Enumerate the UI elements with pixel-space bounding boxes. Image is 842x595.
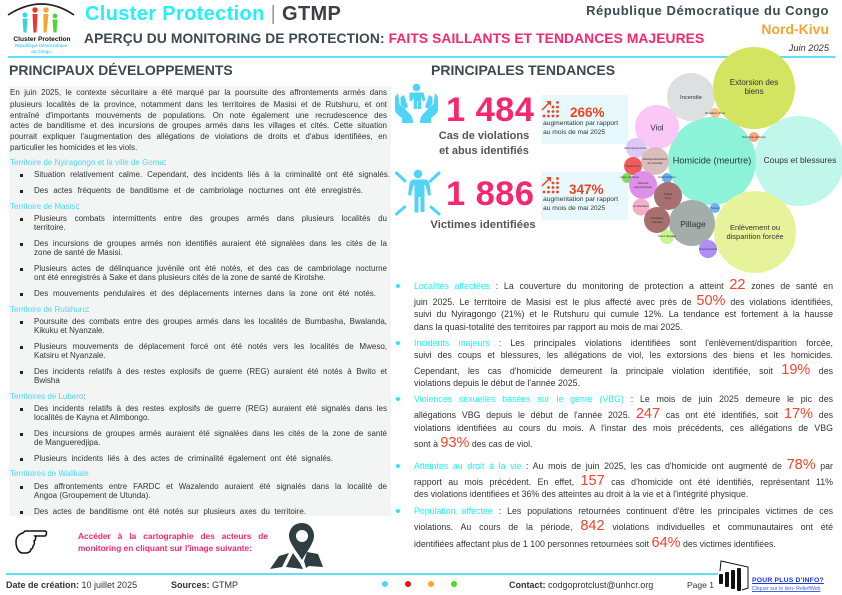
callout: 347%: augmentation par rapport <box>543 196 618 203</box>
panel: principaux développements text: Des actes fréquents de banditisme et de cambriolage nocturnes ont été enregistrés. <box>34 186 363 195</box>
panel: principales tendances text: sont à 93% des cas de viol. <box>414 435 533 451</box>
icon: hands holding person <box>395 84 438 123</box>
panel: principales tendances text: Incidents majeurs : Les principales violations identifiées sont l'enlèvement/disparition forcée, <box>414 338 833 348</box>
panel: principaux développements text: Des mouvements pendulaires et des déplacements internes dans la zone ont été notés. <box>34 289 376 298</box>
panel: principaux développements text: Territoire de Masisi: <box>10 202 79 211</box>
chart: bubble chart of violations: Destruction <box>626 164 641 168</box>
panel: principales tendances text: suivi des coups et blessures, les allégations de viol, les extorsions des biens et les homicides. <box>414 350 833 360</box>
title: Cluster Protection | GTMP <box>85 3 341 25</box>
icon: map pin <box>270 523 323 569</box>
logo: Cluster Protection: du Congo <box>31 49 51 54</box>
link: pour plus d'info: POUR PLUS D'INFO? <box>752 577 824 584</box>
chart: bubble chart of violations: forcé <box>665 196 672 200</box>
chart: bubble chart of violations: disparition forcée <box>726 232 784 241</box>
link: pour plus d'info: Cliquer sur le lien- ReliefWeb <box>752 586 820 592</box>
callout: 266% <box>541 95 628 144</box>
panel: principaux développements text: Kikuku et Nyanzale. <box>34 326 105 335</box>
icon: pointing hand <box>15 530 48 554</box>
kpi label: cas de violations: et abus identifiés <box>439 144 529 156</box>
panel: principaux développements text: Territoire de Rutshuru: <box>10 305 89 314</box>
panel: principaux développements text: ont été enregistrés à Sake et dans plusieurs cités de la zone de santé de Kirotshe. <box>34 273 326 282</box>
panel: principaux développements text: Plusieurs combats intermittents entre des groupes armés dans plusieurs localités du <box>34 214 387 223</box>
panel: principaux développements text: zone de santé de Masisi. <box>34 248 122 257</box>
chart: bubble chart of violations: Mutilation/ Privé <box>705 111 725 115</box>
kpi label: cas de violations <box>439 130 529 156</box>
panel: principales tendances text: juin 2025. Le territoire de Masisi est le plus affecté avec près de 50% des violations identifiées, <box>414 293 833 309</box>
panel: principaux développements text: Situation relativement calme. Cependant, des incidents liés à la criminalité ont été signalés. <box>34 170 390 179</box>
panel: principaux développements text: pourrait expliquer l'augmentation des allégations de violations de droits et d'abus identifiées, en <box>10 132 387 141</box>
panel: principaux développements text: particulier les homicides et les viols. <box>10 143 137 152</box>
province heading: Nord-Kivu <box>761 21 829 37</box>
callout: 347%: 347% <box>569 182 604 197</box>
panel: principales tendances text: identifiées affectant plus de 1 100 personnes retournées soit 64% des victimes identifiées. <box>414 535 776 551</box>
callout: 347%: au mois de mai 2025 <box>543 205 605 212</box>
panel: principaux développements text: plusieurs localités de la province, notamment dans les territoires de Masisi et de Rutshuru, et ont <box>10 100 387 109</box>
panel: principaux développements text: Des incidents relatifs à des restes explosifs de guerre (REG) auraient été notés à Bwito et <box>34 367 387 376</box>
chart: bubble chart of violations: Viol <box>650 124 664 132</box>
panel: principales tendances text: Cependant, les cas d'homicide demeurent la principale violation identifiée, soit 19% des <box>414 362 833 378</box>
panel: principaux développements text: territoire. <box>34 223 66 232</box>
panel: principales tendances text: dans la quasi-totalité des territoires par rapport au mois de mai 2025. <box>414 322 682 332</box>
panel: principaux développements text: entraîné d'importants mouvements de populations. On note également une recrudescence des <box>10 111 387 120</box>
logo: Cluster Protection: République Démocratique <box>15 43 68 48</box>
chart: bubble chart of violations: Discrimination <box>658 175 676 179</box>
footer: contact: Contact: codgoprotclust@unhcr.org <box>509 580 653 590</box>
panel: principaux développements text: En juin 2025, le contexte sécuritaire a été marqué par la poursuite des affrontements armés dans <box>10 88 387 97</box>
panel: principaux développements text: Angoa (Groupement de Utunda). <box>34 491 151 500</box>
panel: principaux développements text: Des actes de banditisme ont été notés sur plusieurs axes du territoire. <box>34 507 306 516</box>
panel: principales tendances text: violations depuis le début de l'année 2025. <box>414 378 580 388</box>
panel: principaux développements text: Plusieurs incidents liés à des actes de criminalité également ont été signalés. <box>34 454 333 463</box>
chart: bubble chart of violations: Coups et blessures <box>764 155 836 165</box>
panel: principaux développements text: actes de banditisme et des incursions de groupes armés dans les villages et cités. Cette situation <box>10 121 387 130</box>
panel: principales tendances text: Localités affectées : La couverture du monitoring de protection a atteint 22 zones de santé en <box>414 277 833 293</box>
chart: bubble chart of violations: Pillage <box>680 219 706 229</box>
panel: principaux développements text: Des incidents relatifs à des restes explosifs de guerre (REG) auraient été signalés dans les <box>34 404 387 413</box>
chart: bubble chart of violations: biens <box>744 87 764 96</box>
chart: bubble chart of violations: Travaux forcés <box>699 247 718 251</box>
callout: 266%: au mois de mai 2025 <box>543 129 605 136</box>
icon: growth dots <box>542 101 559 118</box>
panel: principales tendances text: suivi du Nyiragongo (21%) et le Rutshuru qui cumule 12%. La tendance est fortement à la hausse <box>414 309 833 319</box>
panel: principales tendances text: rapport au mois précédent. En effet, 157 cas d'homicide ont été identifiés, représentant 11% <box>414 473 833 489</box>
panel: principaux développements text: Des affrontements entre FARDC et Wazalendo auraient été signalés dans la localité de <box>34 482 387 491</box>
panel: principaux développements text: Plusieurs mouvements de déplacement forcé ont été notés vers les localités de Mweso, <box>34 342 387 351</box>
panel: principales tendances text: Atteintes au droit à la vie : Au mois de juin 2025, les cas d'homicide ont augmenté de 78% par <box>414 457 833 473</box>
chart: bubble chart of violations: Recrutement forcé <box>624 146 648 150</box>
panel: principaux développements text: Poursuite des combats entre des groupes armés dans les localités de Bumbasha, Bwalanda, <box>34 317 387 326</box>
panel: principales tendances text <box>396 277 833 551</box>
logo: Cluster Protection: Cluster Protection <box>13 36 71 43</box>
chart: bubble chart of violations: psychologique <box>634 185 652 189</box>
callout: 347% <box>541 172 628 220</box>
chart: bubble chart of violations: Torture <box>711 206 720 210</box>
chart: bubble chart of violations: Extorsion des <box>730 78 778 87</box>
chart: bubble chart of violations: arbitraire <box>651 220 663 224</box>
heading: principaux développements: PRINCIPAUX DÉVELOPPEMENTS <box>9 62 233 78</box>
footer: coloured dots <box>382 581 457 587</box>
panel: principales tendances text: Violences sexuelles basées sur le genre (VBG) : Le mois de juin 2025 demeure le pic des <box>414 394 833 404</box>
chart: bubble chart of violations: Travail <box>664 192 673 196</box>
kpi label: cas de violations: Cas de violations <box>439 130 529 142</box>
callout: 266%: 266% <box>570 105 605 120</box>
chart: bubble chart of violations: Homicide (meurtre) <box>673 156 751 166</box>
panel: principaux développements text: de Mangueredjipa. <box>34 438 100 447</box>
kpi: 1 886: 1 886 <box>446 175 534 213</box>
link text: cartographie <box>78 531 268 552</box>
panel: principaux développements text: Des incursions de groupes armés non identifiés auraient été signalées dans les cités de la <box>34 239 387 248</box>
chart: bubble chart of violations: Confiscation <box>633 204 649 208</box>
link: pour plus d'info <box>752 577 824 592</box>
country heading: République Démocratique du Congo <box>586 3 829 18</box>
chart: bubble chart of violations: Détention arbitraire <box>742 135 766 139</box>
kpi: 1 484: 1 484 <box>446 91 534 129</box>
icon: person with rays <box>394 170 441 216</box>
chart: bubble chart of violations: Arrestation <box>650 216 664 220</box>
panel: principaux développements text: Territoire de Nyiragongo et la ville de Goma: <box>10 158 166 167</box>
chart: bubble chart of violations: Enlèvement ou <box>730 223 780 232</box>
chart: bubble chart of violations: Mariage/Séparation <box>643 157 668 161</box>
chart: bubble chart of violations: de la famille <box>648 161 663 165</box>
icon: growth dots <box>542 177 559 194</box>
panel: principales tendances text: violations. Au cours de la période, 842 violations individuelles et communautaires ont été <box>414 518 833 534</box>
panel: principaux développements text: Plusieurs actes de délinquance juvénile ont été notés, et des cas de cambriolage nocturne <box>34 264 387 273</box>
chart: bubble chart of violations: Taxes illégales <box>658 234 677 238</box>
panel: principaux développements text: localités de Kayna et Alimbongo. <box>34 413 150 422</box>
panel: principaux développements text: Territoires de Lubero: <box>10 392 86 401</box>
link text: cartographie: Accéder à la cartographie des acteurs de <box>78 531 268 541</box>
panel: principaux développements text: Des incursions de groupes armés auraient été signalées dans les cités de la zone de santé <box>34 429 387 438</box>
subtitle: APERÇU DU MONITORING DE PROTECTION: FAITS SAILLANTS ET TENDANCES MAJEURES <box>84 31 704 46</box>
logo: Cluster Protection <box>8 3 74 54</box>
link text: cartographie: monitoring en cliquant sur l'image suivante: <box>78 542 252 552</box>
footer: page number: Page 1 <box>687 580 714 590</box>
chart: bubble chart of violations <box>620 47 842 273</box>
panel: principaux développements text: Territoires de Walikale: <box>10 469 91 478</box>
panel: principales tendances text: allégations VBG depuis le début de l'année 2025. 247 cas ont été identifiés, soit 17% des <box>414 406 833 422</box>
panel: principales tendances text: Population affectée : Les populations retournées continuent d'être les principales victimes de ces <box>414 506 833 516</box>
panel: principaux développements text <box>9 86 391 516</box>
chart: bubble chart of violations: Incendie <box>680 95 702 101</box>
panel: principales tendances text: violations identifiées au cours du mois. A l'instar des mois précédents, ces allégations de VBG <box>414 423 833 433</box>
footer: sources: Sources: GTMP <box>171 580 238 590</box>
date: Juin 2025 <box>789 43 829 53</box>
footer: date de création: Date de création: 10 juillet 2025 <box>6 580 137 590</box>
icon: power bi logo <box>719 560 748 591</box>
chart: bubble chart of violations: Violence <box>638 181 649 185</box>
panel: principaux développements text: Katsiru et Nyanzale. <box>34 351 106 360</box>
panel: principales tendances text: des violations identifiées et 36% des atteintes au droit à la vie et à l'intégrité physique. <box>414 489 748 499</box>
panel: principaux développements text: Bwisha <box>34 376 60 385</box>
callout: 266%: augmentation par rapport <box>543 120 618 127</box>
kpi label: victimes identifiées: Victimes identifiées <box>430 219 536 231</box>
heading: principales tendances: PRINCIPALES TENDANCES <box>431 62 615 78</box>
